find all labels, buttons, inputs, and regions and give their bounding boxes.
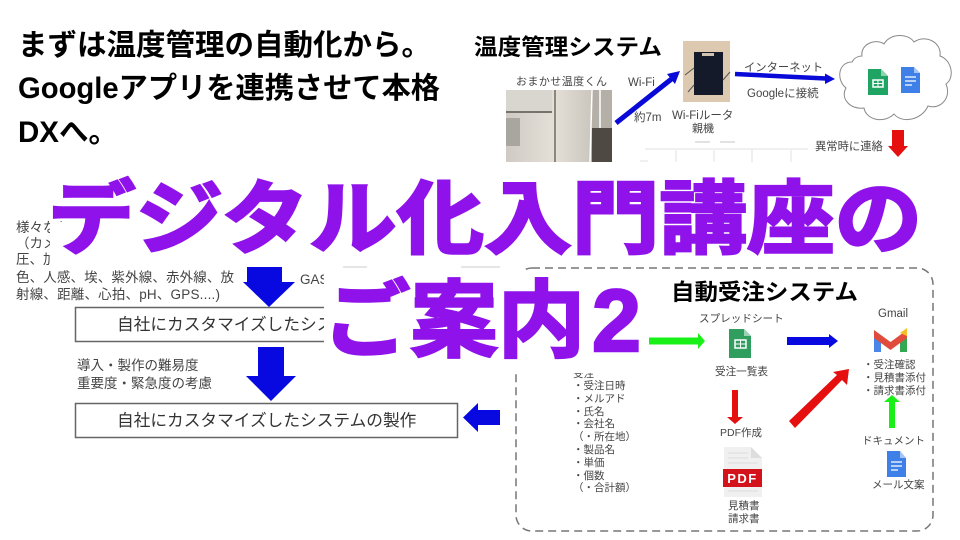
router label: 親機 <box>692 122 714 135</box>
label: distance: 約7m <box>634 110 661 124</box>
order field list: 受注 <box>573 367 594 380</box>
arrow: green input <box>649 333 705 349</box>
order field list: （・所在地） <box>573 430 636 443</box>
label: estimate and invoice: 見積書 <box>728 499 760 512</box>
arrow: alert <box>888 130 908 157</box>
heading: temperature system: 温度管理システム <box>474 35 662 60</box>
intro heading: まずは温度管理の自動化から。 <box>18 29 431 62</box>
box: customized system 2 <box>76 404 458 438</box>
sensor list text: 色、人感、埃、紫外線、赤外線、放 <box>16 269 234 285</box>
order field list: ・会社名 <box>573 417 615 430</box>
title <box>48 175 922 370</box>
panel: temperature management system <box>474 35 951 162</box>
heading: auto order system: 自動受注システム <box>671 280 858 305</box>
title: ご案内 <box>323 275 585 369</box>
arrow: left <box>463 403 500 432</box>
arrow: red down <box>727 390 743 424</box>
order field list: （・合計額） <box>573 481 636 494</box>
arrowhead: internet <box>825 74 835 84</box>
intro heading: Googleアプリを連携させて本格 <box>18 72 440 105</box>
icon: docs <box>901 67 920 93</box>
sensor list text: （カメラ、温度、湿度、気 <box>16 236 178 251</box>
sensor list text: 様々なセンサー <box>16 220 110 235</box>
dashed frame <box>516 268 933 531</box>
label: considerations: 導入・製作の難易度 <box>77 358 198 373</box>
order field list: ・メルアド <box>573 393 626 405</box>
order field list: ・単価 <box>573 456 604 469</box>
box: customized system 1: 自社にカスタマイズしたシステムの製作 <box>117 315 417 334</box>
chart: faint temperature graph <box>640 142 808 162</box>
router label: Wi-Fiルータ <box>672 109 733 122</box>
order field list: ・受注日時 <box>573 379 626 392</box>
arrow: green up <box>884 395 900 428</box>
title: デジタル化入門講座の <box>48 175 922 264</box>
arrow: down 1 <box>243 267 295 307</box>
label: Gmail: Gmail <box>878 308 908 320</box>
icon: cloud <box>840 35 951 120</box>
order field list: ・個数 <box>573 469 605 482</box>
gmail bullet list <box>863 358 926 397</box>
intro heading: DXへ。 <box>18 116 118 149</box>
arrow: wifi link <box>616 77 674 123</box>
arrow: down 2 <box>246 347 296 401</box>
sensor label: おまかせ温度くん <box>516 75 607 88</box>
label: google connection: Googleに接続 <box>747 86 819 100</box>
panel: auto order system <box>516 268 933 531</box>
order field list <box>573 367 636 494</box>
sensor list text: 圧、加速度、音、光、 <box>16 251 151 267</box>
photo: router <box>683 41 730 102</box>
order field list: ・製品名 <box>573 443 615 456</box>
label: order list: 受注一覧表 <box>715 365 768 378</box>
icon: gmail <box>874 328 907 352</box>
title: 2 <box>592 271 641 370</box>
sensor list text <box>16 220 234 302</box>
label: alert contact: 異常時に連絡 <box>815 139 883 153</box>
intro heading <box>18 29 440 149</box>
gmail bullet list: ・受注確認 <box>863 358 916 371</box>
panel: left flow <box>16 220 500 438</box>
GAS label: GAS <box>300 272 329 287</box>
label: estimate and invoice <box>728 499 760 525</box>
icon: pdf: PDF <box>727 471 758 486</box>
arrow: blue to gmail <box>787 334 838 348</box>
gmail bullet list: ・見積書添付 <box>863 371 926 384</box>
box: customized system 1 <box>76 308 417 342</box>
label: internet: インターネット <box>744 61 823 74</box>
arrow: internet <box>735 74 826 78</box>
label: considerations <box>77 358 212 391</box>
icon: docs <box>887 451 906 477</box>
icon: sheets <box>729 329 751 358</box>
gmail bullet list: ・請求書添付 <box>863 384 926 397</box>
order field list: ・氏名 <box>573 405 604 418</box>
sensor list text: 射線、距離、心拍、pH、GPS....) <box>16 287 220 302</box>
label: estimate and invoice: 請求書 <box>728 512 760 525</box>
arrow: red diagonal <box>789 369 849 428</box>
white mask behind title <box>50 222 654 373</box>
label: considerations: 重要度・緊急度の考慮 <box>77 376 212 391</box>
icon: pdf <box>723 447 762 497</box>
label: mail text: メール文案 <box>872 478 925 491</box>
panel: auto order contents <box>649 280 926 525</box>
arrowhead: wifi link <box>667 71 680 84</box>
photo: refrigerator <box>506 90 612 162</box>
label: Wi-Fi: Wi-Fi <box>628 77 655 89</box>
icon: sheets <box>868 69 888 95</box>
label: document: ドキュメント <box>862 435 925 447</box>
label: pdf creation: PDF作成 <box>720 427 762 439</box>
router label <box>672 109 733 135</box>
box: customized system 2: 自社にカスタマイズしたシステムの製作 <box>117 411 417 430</box>
label: spreadsheet: スプレッドシート <box>699 313 784 325</box>
